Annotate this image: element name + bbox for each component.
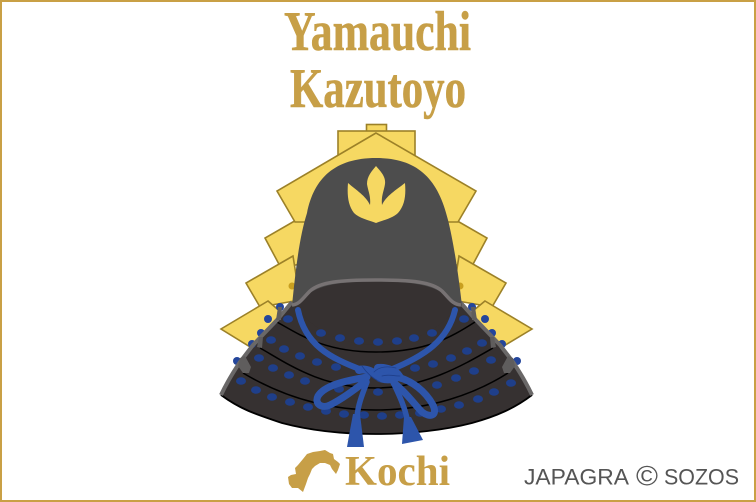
credit: JAPAGRA <box>524 464 629 490</box>
label: Kochi: Kochi <box>345 449 450 495</box>
title: Kazutoyo <box>290 58 466 120</box>
blue cords and tassels <box>298 310 455 447</box>
outer rivets and edge hardware <box>221 302 532 395</box>
credit <box>524 460 739 492</box>
helmet neck guard <box>221 303 532 434</box>
credit: © <box>636 460 658 492</box>
helmet visor <box>292 280 461 345</box>
crest plates behind the helmet <box>221 124 532 353</box>
rivet rows <box>236 315 516 420</box>
title: Yamauchi <box>284 1 471 63</box>
icon: samurai helmet <box>221 124 532 447</box>
credit: SOZOS <box>664 464 739 490</box>
title <box>284 1 471 120</box>
helmet bowl <box>292 158 462 306</box>
plate studs <box>288 282 464 290</box>
icon: Kochi prefecture map <box>288 450 340 492</box>
crest emblem <box>348 166 405 223</box>
